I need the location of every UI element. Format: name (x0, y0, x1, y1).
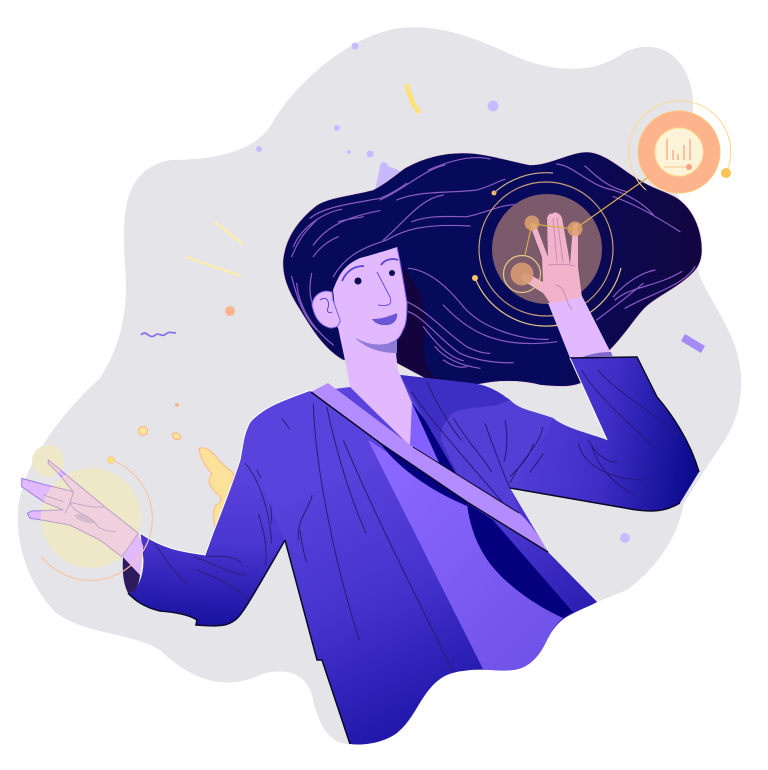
light chest panel (368, 440, 563, 671)
eyebrows (342, 259, 398, 281)
arm folds (412, 370, 677, 503)
palm lines (43, 492, 116, 532)
shoulder strap (311, 383, 548, 552)
sleeve lower outline (128, 540, 285, 626)
sleeve folds (155, 418, 305, 600)
hair mass (283, 152, 702, 386)
arm shadow on forearm (583, 352, 613, 357)
touch rings and arcs (475, 173, 621, 326)
ear (312, 291, 340, 328)
palm shadow (74, 514, 95, 523)
torso folds (298, 403, 453, 673)
strap lower edge (311, 392, 548, 552)
arm sleeve (400, 357, 699, 513)
hand pink where over circles (40, 459, 138, 557)
right arm (400, 357, 699, 513)
face right edge (390, 247, 407, 343)
badge inner circle (655, 128, 703, 176)
hair strands (292, 158, 695, 368)
eyes (354, 270, 395, 284)
navy collar (412, 403, 460, 480)
dot: orange (225, 306, 235, 316)
splash: yellow behind sleeve (199, 448, 234, 530)
badge outer arc (629, 101, 731, 190)
dot: lavender top (352, 42, 358, 50)
wrist (123, 533, 143, 575)
torso base (260, 375, 597, 745)
chart badge (629, 101, 731, 193)
squiggle: purple (141, 332, 176, 337)
face (333, 247, 407, 344)
left hand overlay circles (32, 445, 141, 568)
strap right edge (413, 447, 519, 513)
badge orange ring (638, 111, 720, 193)
confetti and paint splashes (138, 42, 705, 543)
neck and face (312, 247, 412, 446)
left hand (22, 460, 143, 575)
navy fold (467, 503, 573, 618)
hand arc (41, 460, 152, 580)
hand purple base (22, 460, 138, 557)
nose (377, 272, 391, 306)
neck (336, 318, 412, 446)
hair shadow behind neck (360, 265, 440, 383)
rectangle: violet (681, 334, 705, 353)
torso (260, 375, 597, 745)
cuff interior (123, 557, 140, 593)
hair dot: yellow (472, 275, 478, 281)
dark shoulder (400, 375, 510, 478)
gesture nodes and connecting lines (504, 178, 647, 292)
hair (283, 152, 702, 386)
dot: lavender lower (620, 533, 630, 543)
ear detail (320, 298, 332, 313)
lines: pale yellow (186, 222, 243, 276)
arm inner edge white (570, 358, 607, 440)
dot: tiny orange (175, 403, 179, 407)
torso left edge (285, 540, 350, 744)
dots: yellow droplets (138, 426, 182, 441)
upper chest wedge (410, 403, 441, 467)
lips (372, 313, 397, 325)
left sleeve (123, 390, 320, 626)
right forearm (548, 296, 613, 358)
shoulder highlight (441, 400, 553, 513)
dots: lavender cluster (256, 125, 374, 158)
badge yellow dot (721, 168, 731, 178)
arm outline (510, 357, 699, 511)
palm and fingers (521, 212, 582, 303)
navy sliver under strap (380, 443, 467, 506)
neck shadow (355, 335, 397, 353)
right hand (521, 212, 582, 310)
lower flap (493, 520, 597, 612)
badge bar chart (667, 139, 690, 160)
splash: lavender (375, 162, 405, 195)
hand dot (108, 456, 114, 464)
touch circle: brown disc (492, 194, 602, 304)
palm lines (548, 218, 575, 310)
squiggle: yellow (408, 84, 419, 113)
badge axis (664, 164, 692, 170)
hair dot: orange (492, 190, 496, 196)
dot: lavender upper (488, 100, 498, 112)
sleeve shape (128, 390, 320, 626)
